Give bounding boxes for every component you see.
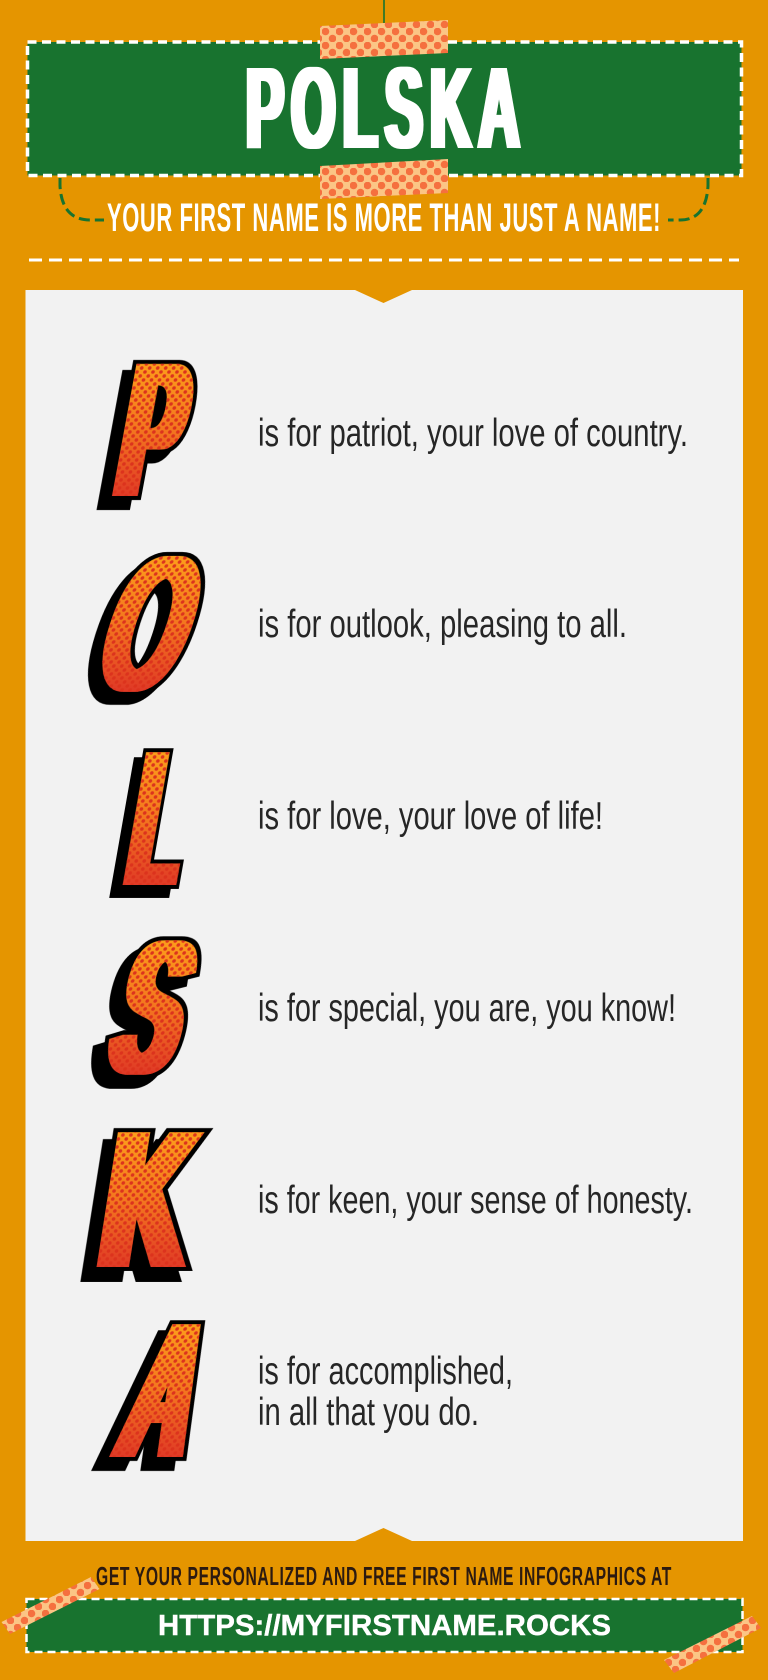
letter P xyxy=(96,360,198,510)
letter K: K xyxy=(79,1102,196,1320)
text O: is for outlook, pleasing to all. xyxy=(258,603,627,646)
letter L xyxy=(109,748,184,898)
letter A: A xyxy=(88,1293,220,1509)
footer banner xyxy=(26,1599,742,1652)
right green curve xyxy=(668,178,708,220)
row O xyxy=(0,518,627,741)
row S xyxy=(0,901,676,1124)
tape left xyxy=(2,1577,100,1634)
row K xyxy=(80,1128,690,1282)
text L: is for love, your love of life! xyxy=(258,795,603,838)
tape bottom xyxy=(320,159,448,199)
text A xyxy=(258,1350,513,1434)
row A xyxy=(90,1320,510,1472)
row P xyxy=(2,324,688,548)
left green curve xyxy=(60,178,104,220)
header banner xyxy=(28,42,742,176)
tape top xyxy=(320,20,448,59)
letter P: P xyxy=(94,334,193,548)
letter A: A xyxy=(100,1283,232,1499)
letter O xyxy=(88,552,206,706)
row L xyxy=(9,710,603,935)
hanging line xyxy=(383,0,385,24)
letter O: O xyxy=(76,518,226,732)
letter S: S xyxy=(93,901,214,1114)
text A: in all that you do. xyxy=(258,1391,479,1434)
letter K: K xyxy=(90,1091,207,1309)
letter L: L xyxy=(116,710,204,926)
letter P: P xyxy=(105,324,203,538)
letter A xyxy=(90,1320,206,1472)
letter S: S xyxy=(81,911,201,1124)
title: POLSKA xyxy=(246,44,527,173)
url: HTTPS://MYFIRSTNAME.ROCKS xyxy=(158,1610,611,1642)
letter K xyxy=(80,1128,214,1282)
main panel xyxy=(26,290,743,1541)
dashed divider xyxy=(29,258,739,262)
tape right xyxy=(664,1616,761,1673)
letter O: O xyxy=(66,527,216,741)
letter S xyxy=(90,936,202,1089)
letter L: L xyxy=(106,719,194,935)
text A: is for accomplished, xyxy=(258,1350,513,1393)
